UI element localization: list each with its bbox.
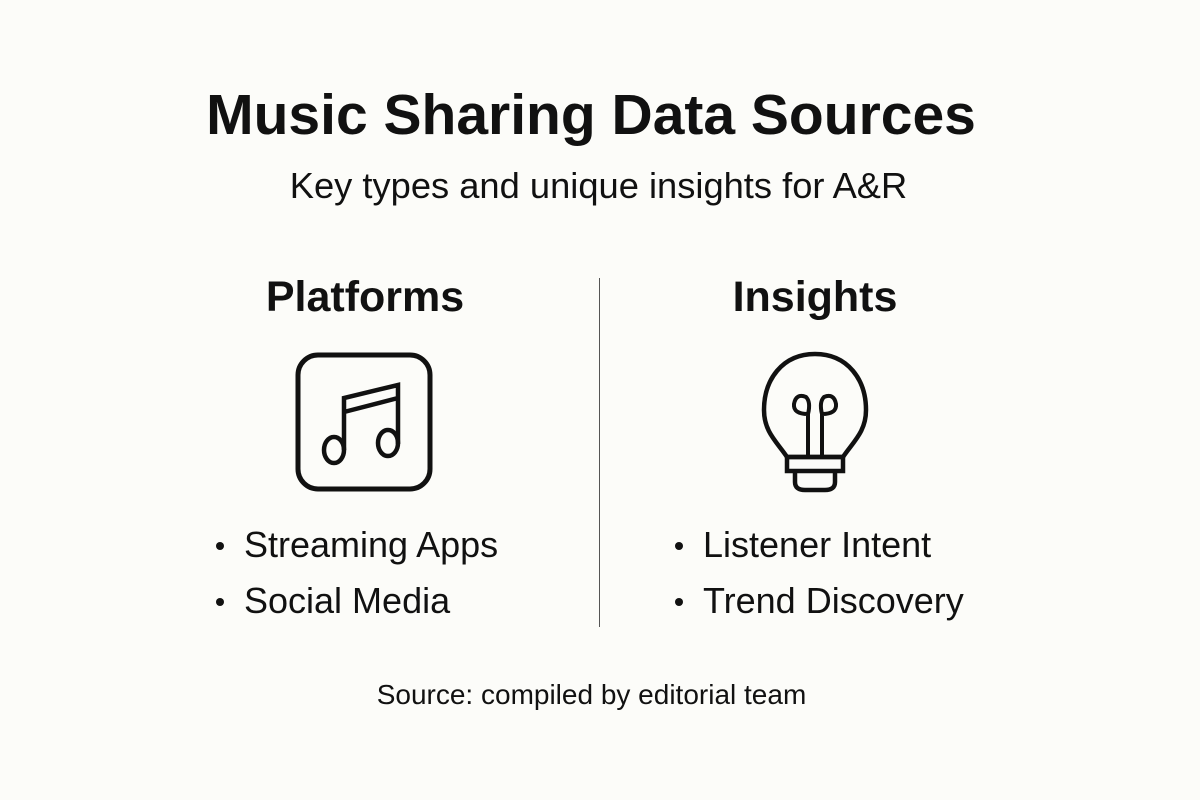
list: platforms: Streaming Apps [244, 524, 498, 565]
list: platforms [216, 524, 498, 621]
title: Music Sharing Data Sources [206, 83, 976, 147]
subtitle: Key types and unique insights for A&R [290, 165, 907, 206]
heading: platforms: Platforms [266, 273, 464, 321]
icon: light bulb [762, 352, 868, 492]
list: insights: Listener Intent [703, 524, 931, 565]
panel: insights [675, 273, 964, 621]
list: insights: Trend Discovery [703, 580, 964, 621]
heading: insights: Insights [733, 273, 897, 321]
panel: platforms [216, 273, 498, 621]
list: platforms: Social Media [244, 580, 450, 621]
icon: music note [296, 352, 432, 492]
list: insights [675, 524, 964, 621]
source: Source: compiled by editorial team [377, 679, 806, 710]
